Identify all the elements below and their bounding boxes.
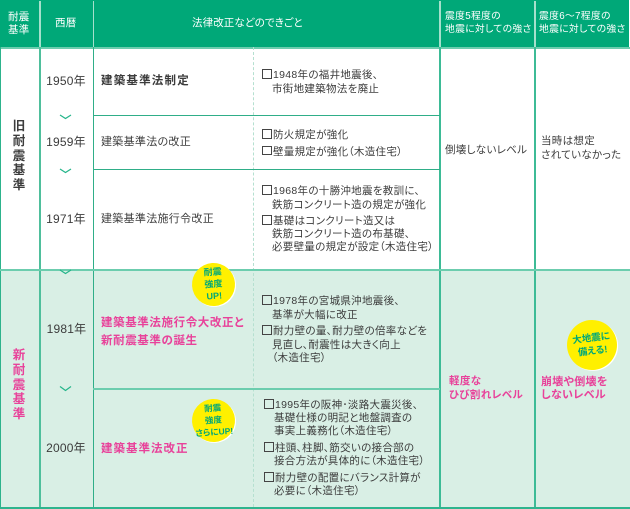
year 1971: 1971年 bbox=[46, 212, 86, 226]
chevron bbox=[60, 168, 72, 174]
new standard vertical label: 新耐震基準 bbox=[13, 348, 25, 421]
year 1950: 1950年 bbox=[46, 74, 86, 88]
detail 1950: 1948年の福井地震後、 bbox=[273, 69, 378, 81]
header: seismic standard: 基準 bbox=[8, 24, 30, 36]
header: intensity 6-7 bbox=[539, 10, 626, 35]
badge: strength up bbox=[191, 262, 236, 307]
detail 2000: 基礎仕様の明記と地盤調査の bbox=[274, 412, 412, 424]
detail 1959 bbox=[262, 129, 403, 158]
detail 1959: 壁量規定が強化（木造住宅） bbox=[273, 146, 403, 158]
header: intensity 5 bbox=[445, 10, 532, 35]
header: intensity 5: 地震に対しての強さ bbox=[445, 24, 532, 35]
badge: strength further up: さらにUP! bbox=[195, 426, 233, 438]
detail 1981: 基準が大幅に改正 bbox=[272, 309, 358, 321]
old standard intensity 6-7 strength: されていなかった bbox=[541, 149, 621, 161]
event: 1959 revision: 建築基準法の改正 bbox=[101, 136, 191, 148]
detail 2000: 耐力壁の配置にバランス計算が bbox=[275, 472, 421, 484]
header: seismic standard: 耐震 bbox=[8, 11, 30, 23]
detail 2000: 接合方法が具体的に（木造住宅） bbox=[274, 455, 425, 467]
detail 1950 bbox=[262, 69, 379, 94]
detail 1971: 鉄筋コンクリート造の規定が強化 bbox=[272, 198, 426, 210]
badge: strength up: UP! bbox=[206, 290, 222, 302]
detail 1971: 鉄筋コンクリート造の布基礎、 bbox=[272, 228, 410, 240]
detail 1981: 見直し、耐震性は大きく向上 bbox=[272, 338, 401, 350]
event: 1971 revision: 建築基準法施行令改正 bbox=[101, 213, 214, 225]
detail 2000 bbox=[264, 399, 425, 497]
detail 1971: 基礎はコンクリート造又は bbox=[273, 215, 395, 227]
detail 2000: 必要に（木造住宅） bbox=[274, 485, 360, 497]
new standard intensity 6-7 strength: 崩壊や倒壊を bbox=[541, 376, 608, 388]
detail 1959: 防火規定が強化 bbox=[273, 129, 348, 141]
year 2000: 2000年 bbox=[46, 441, 86, 455]
new standard intensity 5 strength: 軽度な bbox=[449, 375, 481, 387]
badge: prepare for big earthquake: 大地震に bbox=[572, 331, 611, 346]
badge: strength up: 強度 bbox=[204, 278, 223, 290]
detail 1981 bbox=[262, 295, 427, 364]
new standard intensity 5 strength: ひび割れレベル bbox=[449, 388, 523, 400]
badge: strength further up: 耐震 bbox=[204, 402, 221, 414]
header column separators bbox=[39, 1, 536, 47]
header: seismic standard bbox=[8, 11, 30, 36]
detail 1981: 1978年の宮城県沖地震後、 bbox=[273, 295, 400, 307]
event: 1981 revision: 新耐震基準の誕生 bbox=[101, 335, 198, 347]
header: intensity 6-7: 震度6〜7程度の bbox=[539, 11, 611, 22]
old standard intensity 5 strength: 倒壊しないレベル bbox=[445, 144, 527, 156]
chevron bbox=[60, 386, 72, 392]
year 1981: 1981年 bbox=[47, 322, 86, 336]
detail 1971 bbox=[262, 185, 434, 253]
event: 1981 revision: 建築基準法施行令大改正と bbox=[101, 317, 244, 329]
badge: strength further up: 強度 bbox=[205, 414, 222, 426]
badge: strength up: 耐震 bbox=[203, 266, 222, 278]
detail 2000: 柱頭、柱脚、筋交いの接合部の bbox=[275, 442, 414, 454]
detail 1981: 耐力壁の量、耐力壁の倍率などを bbox=[273, 325, 427, 337]
event: building standards act: 建築基準法制定 bbox=[101, 75, 190, 87]
badge: strength further up bbox=[191, 398, 236, 443]
new standard tinted background bbox=[0, 270, 630, 508]
year 1959: 1959年 bbox=[46, 135, 86, 149]
detail 2000: 1995年の阪神･淡路大震災後、 bbox=[275, 399, 418, 411]
detail 1971: 必要壁量の規定が設定（木造住宅） bbox=[272, 241, 434, 253]
event: 2000 revision: 建築基準法改正 bbox=[101, 443, 188, 455]
detail 2000: 事実上義務化（木造住宅） bbox=[274, 425, 393, 437]
new standard intensity 5 strength bbox=[449, 375, 523, 400]
old standard vertical label: 旧耐震基準 bbox=[13, 119, 25, 192]
detail 1971: 1968年の十勝沖地震を教訓に、 bbox=[273, 185, 420, 197]
header: intensity 5: 震度5程度の bbox=[445, 11, 501, 22]
old standard intensity 6-7 strength bbox=[541, 135, 621, 161]
header: events: 法律改正などのできごと bbox=[192, 17, 303, 29]
new standard intensity 6-7 strength: しないレベル bbox=[541, 389, 606, 401]
old standard intensity 6-7 strength: 当時は想定 bbox=[541, 135, 595, 147]
chevron bbox=[60, 114, 72, 120]
header bar bbox=[0, 0, 629, 47]
header: intensity 6-7: 地震に対しての強さ bbox=[539, 24, 626, 35]
header: year: 西暦 bbox=[55, 17, 77, 29]
detail 1950: 市街地建築物法を廃止 bbox=[272, 82, 379, 94]
event: 1981 revision bbox=[101, 316, 244, 347]
detail 1981: （木造住宅） bbox=[272, 352, 326, 364]
badge: prepare for big earthquake bbox=[564, 317, 620, 373]
badge: prepare for big earthquake: 備える! bbox=[577, 344, 608, 359]
new standard intensity 6-7 strength bbox=[541, 376, 608, 401]
chevron bbox=[60, 270, 72, 274]
